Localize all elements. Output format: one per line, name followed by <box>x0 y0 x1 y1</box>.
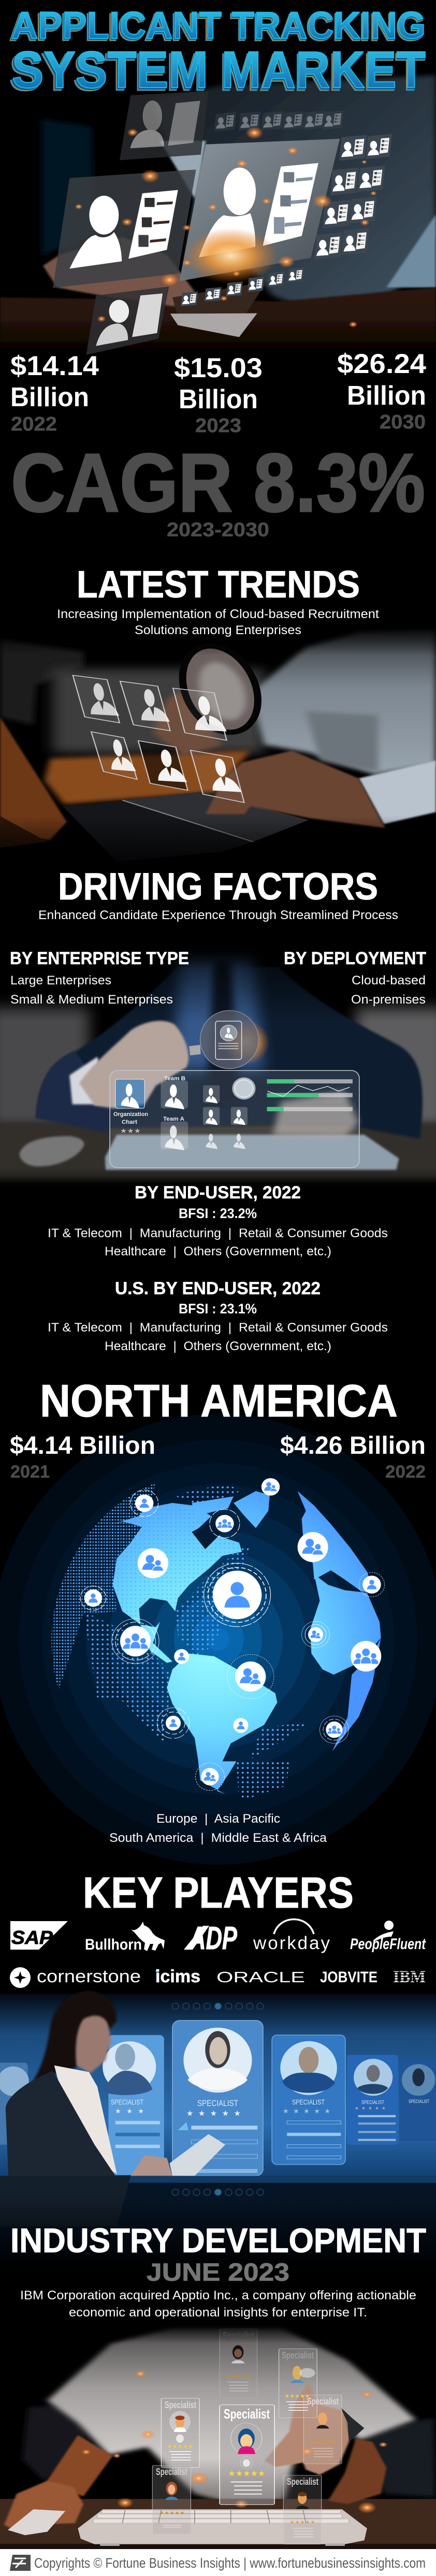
logo: SAP: SAP <box>11 1927 53 1948</box>
footer bar <box>0 2549 436 2576</box>
logo: PeopleFluent <box>350 1921 427 1953</box>
segment: by enterprise type: Large Enterprises <box>10 974 111 988</box>
stat: 2022 market value: 2022 <box>11 413 57 435</box>
orange core glow <box>183 228 278 283</box>
lower blue strip <box>0 2176 436 2183</box>
hero photo: hand on laptop with candidate profile panels <box>0 75 436 355</box>
segment: by deployment <box>284 949 426 1007</box>
user pins <box>80 1478 385 1791</box>
typing fingers <box>272 1091 359 1137</box>
other regions list: South America | Middle East & Africa <box>109 1831 327 1845</box>
portrait silhouettes <box>85 682 241 795</box>
small faded tiles row <box>214 110 343 132</box>
latest trends description <box>57 607 379 637</box>
far left card <box>0 2063 29 2145</box>
stat: north america 2022 <box>280 1432 426 1482</box>
segment: by end-user 2022 <box>48 1183 388 1258</box>
stat: north america 2022: 2022 <box>385 1462 426 1482</box>
specialist card labels: SPECIALIST <box>361 2100 384 2106</box>
jacket bottom <box>0 2176 130 2227</box>
logo: SAP <box>10 1921 68 1950</box>
logo: cornerstone: cornerstone <box>37 1967 141 1986</box>
computer mouse <box>8 2509 65 2535</box>
latest trends description: Solutions among Enterprises <box>135 623 301 637</box>
stat: 2030 market value <box>337 349 427 433</box>
recruiter jacket <box>6 2071 115 2176</box>
top fade <box>0 2321 436 2343</box>
logo: ADP: ADP <box>189 1921 237 1956</box>
wrist watch <box>341 2408 364 2442</box>
segment: U.S. by end-user 2022: IT & Telecom | Manufacturing | Retail & Consumer Goods <box>48 1321 388 1335</box>
specialist card titles and stars: ★★★★★ <box>226 2374 251 2380</box>
heading: north america: NORTH AMERICA <box>40 1375 398 1426</box>
driving factors description: Enhanced Candidate Experience Through Streamlined Process <box>38 908 398 922</box>
europe and asia edge <box>298 1491 374 1593</box>
blue haze background <box>0 1994 436 2179</box>
segment: by end-user 2022: BY END-USER, 2022 <box>135 1183 301 1203</box>
desk <box>0 2499 436 2549</box>
card top faint <box>220 2329 257 2398</box>
stat: 2023 market value: Billion <box>179 384 258 414</box>
orange sparks <box>75 126 377 327</box>
specialist card labels: SPECIALIST <box>197 2098 238 2108</box>
dotted ocean left crescent <box>51 1483 156 1689</box>
specialist card titles and stars: Specialist <box>224 2406 270 2422</box>
specialist card labels: ★★★★★ <box>283 2108 330 2115</box>
specialist card labels: SPECIALIST <box>409 2099 429 2104</box>
donut chart <box>234 1079 254 1098</box>
glass organisation chart panel <box>110 1070 359 1168</box>
progress bars <box>267 1079 353 1083</box>
organisation chart labels: Team B <box>164 1076 185 1082</box>
stat: north america 2021: $4.14 Billion <box>10 1432 155 1459</box>
holding hand <box>79 1021 188 1108</box>
industry development description: economic and operational insights for enterprise IT. <box>69 2306 367 2320</box>
small tile grid right <box>314 134 392 260</box>
pointing hand <box>264 2382 351 2475</box>
card upper left <box>161 2398 199 2467</box>
left card <box>103 2035 164 2175</box>
title line one: APPLICANT TRACKING <box>10 6 426 48</box>
shirt and tie stripe <box>172 959 264 1070</box>
logo: Bullhorn: Bullhorn <box>85 1936 142 1953</box>
specialist card labels: ★★★★★ <box>355 2106 386 2111</box>
right forearm <box>328 2439 386 2504</box>
segment: by deployment: BY DEPLOYMENT <box>284 949 426 968</box>
light beam <box>160 141 206 271</box>
stat: 2023 market value: 2023 <box>195 415 241 437</box>
globe map with user pins <box>51 1478 385 1801</box>
concentric glow rings behind globe <box>0 1414 436 1865</box>
top fade <box>0 622 436 655</box>
other regions list: Europe | Asia Pacific <box>156 1812 280 1826</box>
suit jacket <box>36 967 423 1139</box>
table <box>0 1123 436 1181</box>
africa <box>310 1575 381 1675</box>
stat: 2023 market value: $15.03 <box>174 353 263 383</box>
trackpad deck <box>122 792 309 842</box>
keyboard <box>105 1135 399 1170</box>
segment: by end-user 2022: Healthcare | Others (Government, etc.) <box>105 1244 331 1258</box>
logo: IBM: IBM <box>393 1968 426 1986</box>
title line one: APPLICANT TRACKING <box>9 7 425 49</box>
dotted ocean regions <box>83 1484 309 1801</box>
logo: cornerstone <box>10 1967 141 1988</box>
north america <box>107 1496 242 1663</box>
segment: U.S. by end-user 2022 <box>48 1279 388 1353</box>
organisation chart labels: ★★★ <box>120 1127 141 1135</box>
organisation chart labels: Team A <box>163 1116 184 1122</box>
far right card <box>399 2059 436 2141</box>
stat: north america 2022: $4.26 Billion <box>280 1432 426 1459</box>
stat: 2030 market value: Billion <box>347 381 426 411</box>
specialist card labels: SPECIALIST <box>292 2098 325 2106</box>
typing hand <box>206 751 385 828</box>
second pagination dots <box>172 2189 264 2195</box>
small tile row bottom <box>181 268 304 306</box>
panel: left profile <box>53 169 196 288</box>
specialist card labels: SPECIALIST <box>111 2098 143 2106</box>
card mid right <box>303 2395 342 2464</box>
specialist card titles and stars: Specialist <box>156 2467 187 2477</box>
keyboard and laptop base <box>172 281 267 317</box>
specialist card labels: ★★★ <box>115 2108 144 2115</box>
tablet and hand <box>130 2134 225 2176</box>
southern crescent <box>332 1638 381 1751</box>
segment: by end-user 2022: BFSI : 23.2% <box>179 1206 257 1221</box>
laptop lid left <box>0 717 67 840</box>
mouse <box>20 1136 84 1166</box>
industry development description <box>20 2288 416 2320</box>
specialist card titles and stars: Specialist <box>307 2396 339 2407</box>
portrait frames <box>73 675 244 803</box>
left arm <box>46 2435 112 2496</box>
shirt <box>250 629 436 775</box>
pagination dots top <box>172 2003 264 2009</box>
stat: north america 2021 <box>10 1432 155 1482</box>
logo: Jobvite: JOBVITE <box>320 1969 377 1986</box>
photo: magnifying glass over candidate portraits <box>0 622 436 874</box>
specialist card titles and stars: ★★★★★ <box>159 2511 184 2516</box>
magnifying glass <box>171 640 270 738</box>
title line one: APPLICANT TRACKING <box>10 6 425 48</box>
segment: U.S. by end-user 2022: U.S. BY END-USER, 2022 <box>115 1279 321 1298</box>
small right card <box>347 2055 398 2145</box>
logo: ADP <box>184 1921 237 1956</box>
specialist card titles and stars: Specialist <box>282 2350 314 2360</box>
segment: U.S. by end-user 2022: BFSI : 23.1% <box>179 1301 257 1316</box>
heading: key players: KEY PLAYERS <box>83 1868 354 1917</box>
dark sleeves <box>22 2404 89 2482</box>
specialist card titles and stars: ★★★★★ <box>285 2394 310 2399</box>
footer logo <box>10 2555 31 2571</box>
specialist card labels <box>111 2098 429 2118</box>
stat: 2022 market value <box>10 351 99 435</box>
photo: recruiter reviewing specialist profile cards <box>0 1991 436 2269</box>
heading: driving factors: DRIVING FACTORS <box>58 866 378 908</box>
keyboard <box>78 2509 367 2546</box>
logo: iCIMS: icims <box>155 1967 200 1986</box>
specialist card titles and stars: ★★★★★ <box>228 2469 265 2478</box>
person dark jacket <box>42 119 95 256</box>
card top right <box>279 2349 317 2418</box>
sleeve <box>36 1052 111 1134</box>
orange desk <box>45 751 250 804</box>
blurred plant <box>0 639 83 725</box>
segment: by enterprise type: Small & Medium Enterprises <box>10 993 173 1007</box>
left hand <box>4 2481 83 2528</box>
specialist card titles and stars: ★★★★★ <box>311 2440 336 2445</box>
glow sparks <box>82 2370 388 2513</box>
stat: north america 2021: 2021 <box>10 1462 50 1482</box>
bottom fade <box>0 1168 436 1202</box>
organisation chart labels <box>113 1076 185 1135</box>
grey wall <box>53 669 264 753</box>
stat: 2030 market value: $26.24 <box>337 349 427 379</box>
stat: 2030 market value: 2030 <box>380 411 426 433</box>
greenland <box>234 1491 270 1528</box>
title line one: APPLICANT TRACKING <box>11 5 426 47</box>
specialist card labels: ★★★★★ <box>186 2109 241 2118</box>
stat: 2022 market value: $14.14 <box>10 351 99 381</box>
recruiter hair <box>25 1991 117 2092</box>
logo: workday <box>253 1919 330 1953</box>
logo: Bullhorn <box>85 1922 165 1953</box>
photo: hand selecting specialist cards over keyboard <box>0 2321 436 2549</box>
right card <box>272 2035 345 2165</box>
specialist card titles and stars: Specialist <box>223 2330 254 2341</box>
stat: 2022 market value: Billion <box>10 382 89 412</box>
hand typing <box>43 237 195 306</box>
other regions list <box>109 1812 327 1845</box>
bright wedge lower right <box>386 214 436 288</box>
industry development date: JUNE 2023 <box>147 2259 289 2286</box>
specialist card titles and stars <box>156 2330 339 2525</box>
stat: 2023 market value <box>174 353 263 437</box>
laptop lid background <box>150 75 436 311</box>
segment: U.S. by end-user 2022: Healthcare | Others (Government, etc.) <box>105 1339 331 1353</box>
panel: central profile <box>179 139 340 281</box>
logo: Oracle: ORACLE <box>216 1969 305 1986</box>
CAGR period: 2023-2030 <box>167 519 269 541</box>
big centre pin <box>204 1563 271 1627</box>
central card <box>172 2021 263 2176</box>
card lower right <box>283 2475 322 2544</box>
bottom fade <box>0 2195 436 2269</box>
specialist card titles and stars: ★★★★★ <box>167 2444 193 2450</box>
desk wood <box>0 288 436 355</box>
magnifier <box>189 1010 270 1069</box>
cuff <box>359 761 436 824</box>
holding hand <box>153 691 223 756</box>
shirt <box>47 2328 416 2501</box>
panel: top faded profile <box>120 91 209 160</box>
specialist card titles and stars: Specialist <box>165 2400 196 2410</box>
main specialist card <box>220 2405 274 2505</box>
specialist card titles and stars: Specialist <box>287 2477 318 2487</box>
panel: lower profile <box>86 287 169 355</box>
latest trends description: Increasing Implementation of Cloud-based Recruitment <box>57 607 379 621</box>
bottom fade <box>0 816 436 874</box>
side walls <box>0 1007 89 1128</box>
segment: by deployment: On-premises <box>351 993 426 1007</box>
south america <box>167 1654 277 1794</box>
logo: workday: workday <box>253 1933 330 1953</box>
top fade <box>0 933 436 1022</box>
heading: latest trends: LATEST TRENDS <box>77 564 360 606</box>
organisation chart labels: Organization <box>113 1111 148 1118</box>
recruiter shirt <box>54 2065 117 2174</box>
photo: businessman inspecting organisation chart <box>0 933 436 1202</box>
keyboard <box>63 800 253 862</box>
segment: by end-user 2022: IT & Telecom | Manufacturing | Retail & Consumer Goods <box>48 1226 388 1240</box>
recruiter face <box>76 2016 111 2073</box>
industry development description: IBM Corporation acquired Apptio Inc., a company offering actionable <box>20 2288 416 2302</box>
segment: by deployment: Cloud-based <box>352 974 426 988</box>
segment: by enterprise type: BY ENTERPRISE TYPE <box>10 949 189 968</box>
cuff <box>69 1057 111 1105</box>
organisation chart labels: Chart <box>122 1119 137 1125</box>
segment: by enterprise type <box>10 949 189 1007</box>
card lower left <box>152 2465 191 2535</box>
specialist card titles and stars: ★★★★★ <box>290 2520 315 2525</box>
